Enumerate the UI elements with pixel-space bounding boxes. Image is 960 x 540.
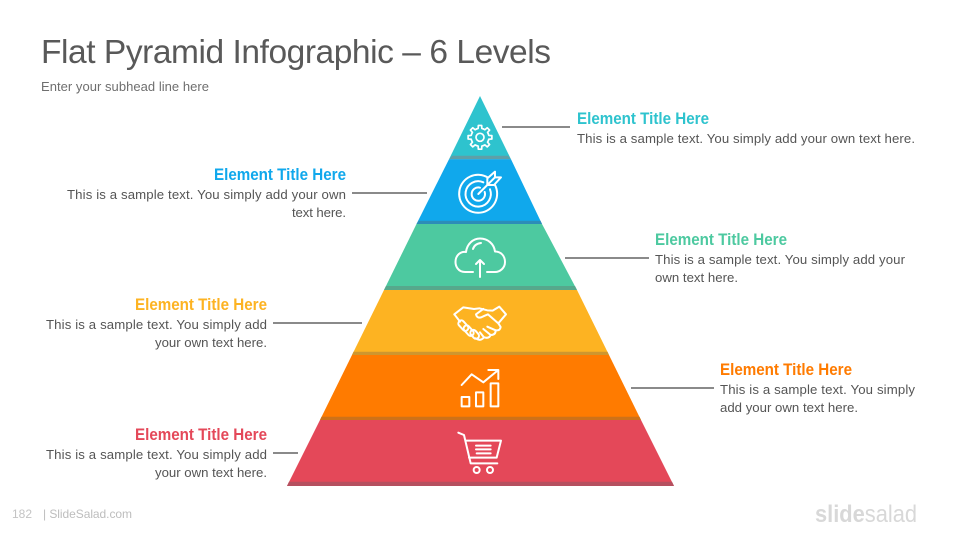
icon: gear — [468, 125, 492, 149]
callout 1: top right: Element Title Here — [577, 110, 709, 128]
level 2: blue — [416, 159, 542, 224]
callout 3: green right — [565, 231, 906, 285]
callout 3: green right: Element Title Here — [655, 231, 787, 249]
icon: growth chart — [462, 370, 498, 406]
callout 5: orange right — [631, 361, 915, 415]
callout 5: orange right: Element Title Here — [720, 361, 852, 379]
icon: handshake — [454, 307, 506, 340]
callout 2: blue left: Element Title Here — [214, 166, 346, 184]
footer page number: 182 — [12, 507, 32, 521]
callout 4: yellow left — [46, 296, 362, 350]
callout 6: red left: your own text here. — [155, 465, 267, 480]
callout 1: top right — [502, 110, 915, 146]
icon: cloud upload — [456, 238, 505, 277]
callout 2: blue left — [67, 166, 427, 220]
level 1: teal — [449, 96, 511, 159]
subhead: Enter your subhead line here — [41, 79, 209, 94]
level 4: yellow — [352, 290, 609, 355]
callout 5: orange right: add your own text here. — [720, 400, 858, 415]
logo wordmark: slidesalad — [815, 501, 917, 528]
callout 5: orange right: This is a sample text. You simply — [720, 382, 915, 397]
level 6: red — [287, 420, 674, 486]
callout 6: red left: This is a sample text. You simply add — [46, 447, 267, 462]
level 5: orange — [320, 355, 641, 420]
callout 1: top right: This is a sample text. You simply add your own text here. — [577, 131, 915, 146]
callout 6: red left: Element Title Here — [135, 426, 267, 444]
footer source: | SlideSalad.com — [43, 507, 132, 521]
callout 6: red left — [46, 426, 298, 480]
title: Flat Pyramid Infographic – 6 Levels — [41, 34, 551, 71]
callout 2: blue left: text here. — [292, 205, 346, 220]
pyramid — [287, 96, 674, 486]
level 3: green — [384, 224, 577, 290]
callout 4: yellow left: This is a sample text. You simply add — [46, 317, 267, 332]
callout 3: green right: This is a sample text. You simply add your — [655, 252, 906, 267]
callout 4: yellow left: Element Title Here — [135, 296, 267, 314]
icon: shopping cart — [458, 433, 501, 473]
callout 4: yellow left: your own text here. — [155, 335, 267, 350]
icon: target — [459, 172, 501, 213]
callout 2: blue left: This is a sample text. You simply add your own — [67, 187, 346, 202]
callout 3: green right: own text here. — [655, 270, 738, 285]
